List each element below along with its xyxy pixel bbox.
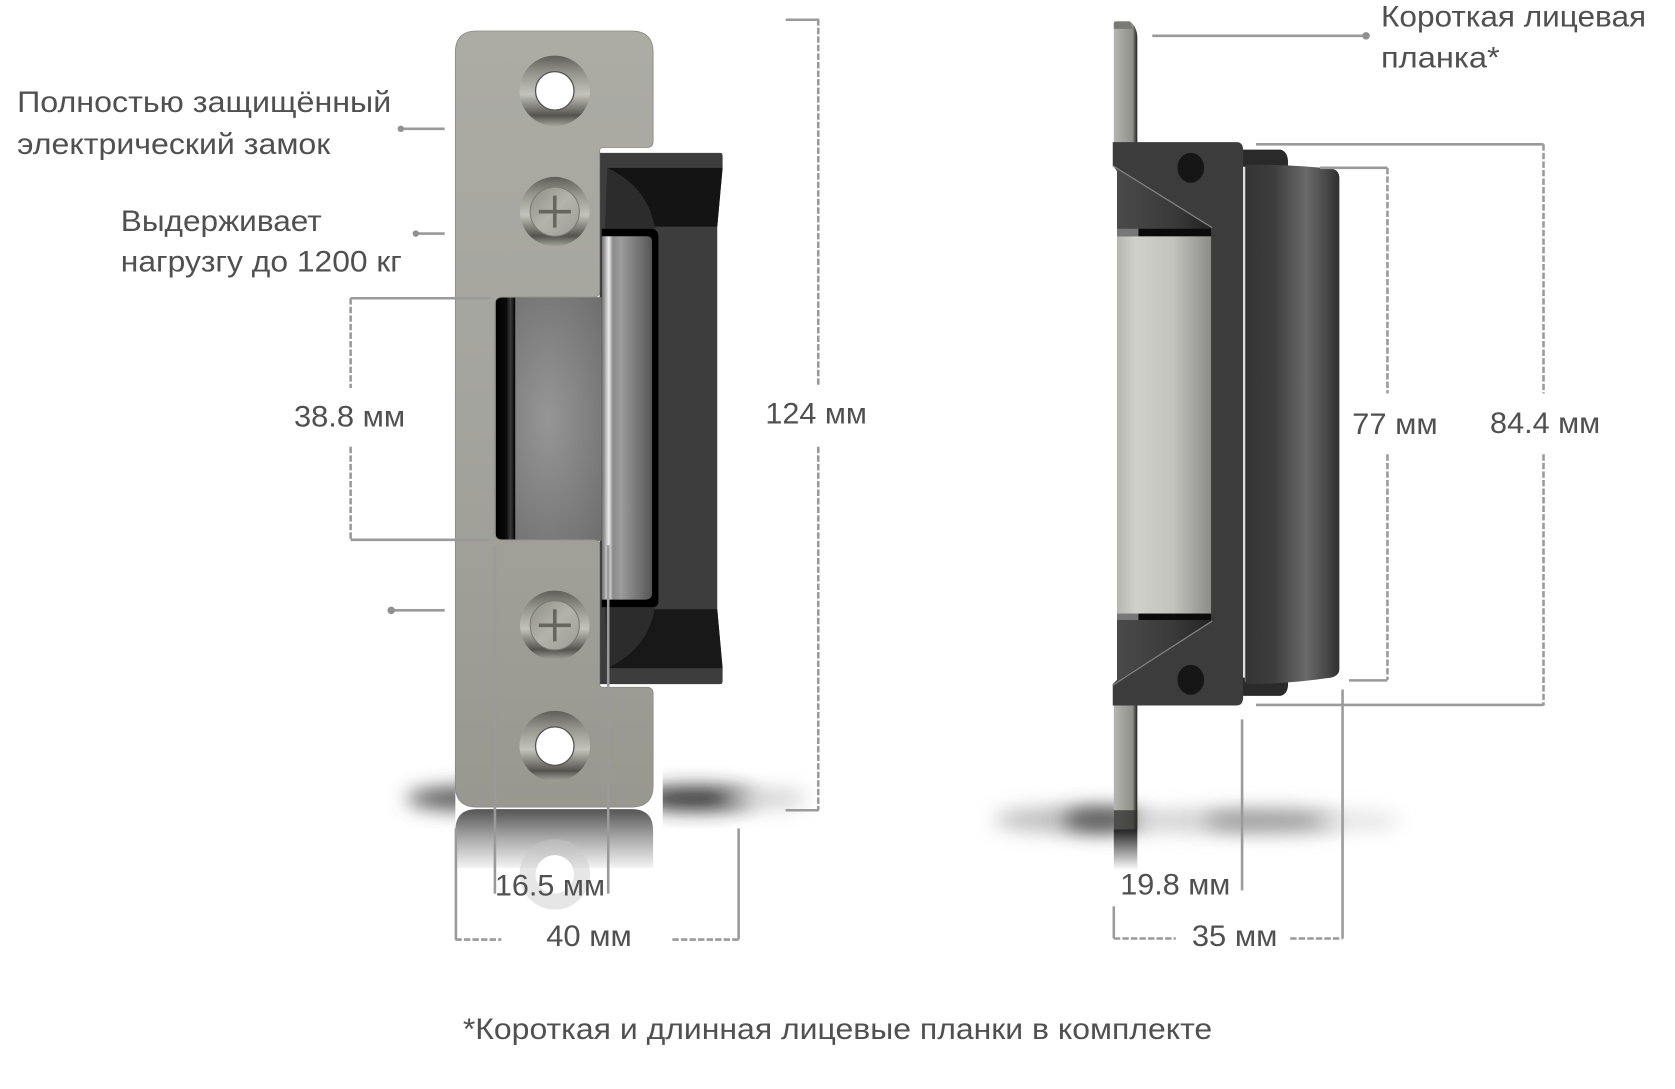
screw bottom xyxy=(520,591,590,660)
hole bottom xyxy=(520,711,590,781)
latch side xyxy=(1117,236,1211,615)
dimension 16.5 xyxy=(495,545,608,894)
dimension 40 xyxy=(455,828,739,940)
dimension 19.8 xyxy=(1241,719,1243,890)
value 77 mm: 77 мм xyxy=(1352,408,1438,441)
label: load line 2: нагрузгу до 1200 кг xyxy=(121,246,402,279)
front view of lock xyxy=(406,31,807,910)
opening xyxy=(494,297,602,541)
callout lines xyxy=(387,32,1370,614)
side plate top xyxy=(1114,21,1137,144)
hole top xyxy=(520,56,590,126)
dimension 84.4 xyxy=(1256,144,1544,705)
value 19.8 mm: 19.8 мм xyxy=(1120,869,1230,902)
label: short face plate: Короткая лицевая xyxy=(1381,1,1646,34)
label: fully protected lock line 2: электрический замок xyxy=(17,128,331,161)
strike plate xyxy=(455,31,653,807)
wedge bottom xyxy=(1113,614,1212,685)
value 38.8 mm: 38.8 мм xyxy=(294,400,405,433)
dimension 38.8 xyxy=(351,298,490,540)
screw top xyxy=(520,177,590,246)
black housing xyxy=(600,153,723,684)
latch xyxy=(602,236,652,600)
dimension 77 xyxy=(1320,168,1387,680)
label: short face plate line 2: планка* xyxy=(1381,41,1500,74)
dimension 35 xyxy=(1114,689,1343,938)
seam xyxy=(1244,167,1246,682)
label: load: Выдерживает xyxy=(121,205,322,238)
side view of lock xyxy=(994,21,1400,870)
footnote: *Короткая и длинная лицевые планки в комплекте xyxy=(463,1013,1212,1046)
value 16.5 mm: 16.5 мм xyxy=(495,870,605,903)
frame xyxy=(1113,142,1243,705)
plate reflection xyxy=(455,809,653,910)
value 84.4 mm: 84.4 мм xyxy=(1490,407,1600,440)
pins xyxy=(1240,150,1288,696)
value 124 mm: 124 мм xyxy=(765,397,867,430)
floor shadow side view xyxy=(994,807,1400,833)
wedge top xyxy=(1113,166,1212,236)
side plate bottom xyxy=(1114,705,1137,870)
bolts xyxy=(1177,153,1204,695)
dimension 124 xyxy=(786,19,819,810)
value 40 mm: 40 мм xyxy=(546,920,632,953)
floor shadow left xyxy=(406,787,534,810)
floor shadow right xyxy=(636,787,807,810)
label: fully protected lock: Полностью защищённый xyxy=(17,86,391,119)
value 35 mm: 35 мм xyxy=(1192,920,1277,953)
cylinder xyxy=(1245,165,1339,684)
